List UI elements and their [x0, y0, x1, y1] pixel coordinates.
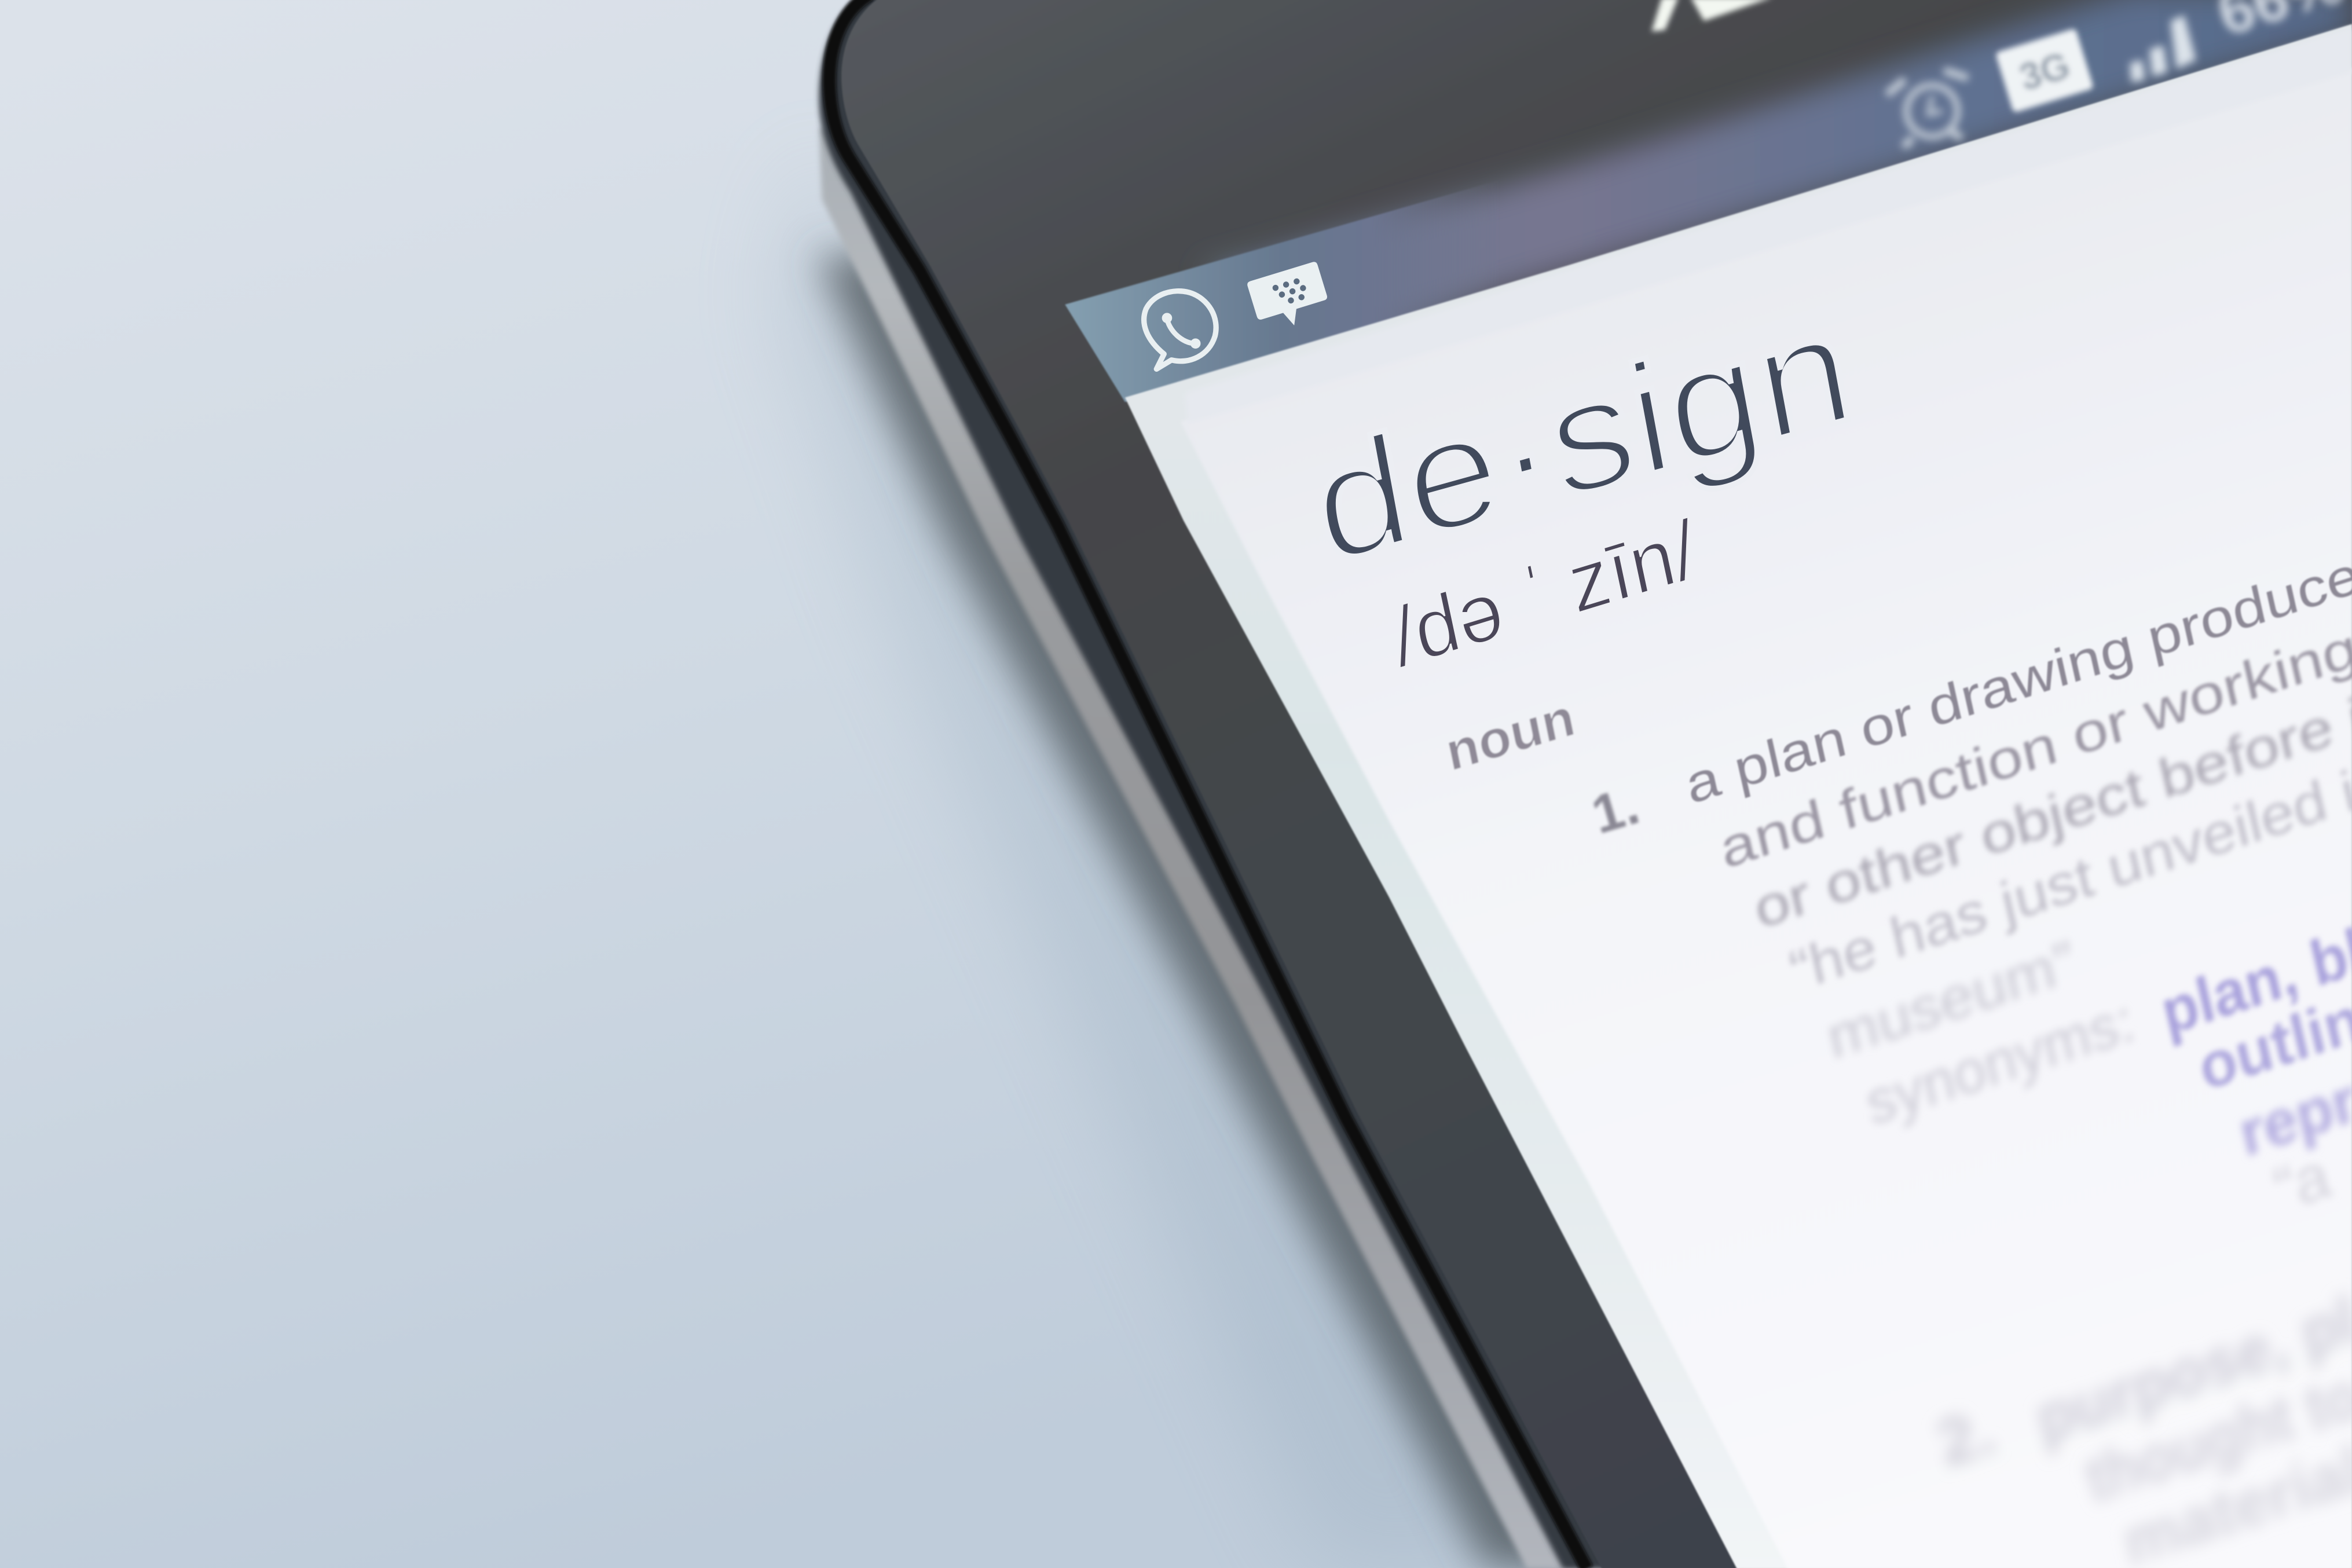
sense number two: 2.	[1929, 1394, 2004, 1481]
status bar	[1065, 0, 2352, 402]
wide soft phone shadow	[780, 150, 1530, 1567]
icon: whatsapp	[1144, 291, 1216, 369]
definition line 2: and function or working	[1714, 617, 2352, 880]
pronunciation: /də ˈ zīn/	[1384, 503, 1705, 685]
screen	[1125, 24, 2352, 1568]
top band of screen	[1185, 27, 2352, 423]
status bar band, in focus	[1065, 160, 1567, 402]
screen outer strip	[1125, 24, 2352, 1568]
part of speech: noun	[1441, 687, 1580, 782]
headword: de·sign	[1300, 278, 1864, 598]
asus logo fragment	[1651, 0, 1773, 31]
icon: alarm clock	[1887, 71, 1968, 147]
example line 1: “he has just unveiled i	[1784, 758, 2352, 1003]
example line 2: museum”	[1821, 928, 2081, 1071]
sense number one: 1.	[1585, 775, 1646, 845]
dark grey bezel	[841, 0, 2352, 1568]
example fragment: “a	[2267, 1140, 2336, 1226]
silver phone side	[819, 127, 1635, 1568]
dark phone rim	[819, 0, 2352, 1568]
definition line 3: or other object before i	[1749, 686, 2352, 940]
contact shadow beside phone	[818, 255, 1590, 1568]
icon: 3G signal badge: 3G	[2014, 43, 2075, 98]
definition card	[1181, 68, 2352, 1568]
synonyms label: synonyms:	[1860, 986, 2140, 1138]
definition text	[1300, 278, 2352, 1568]
definition line 1: a plan or drawing produce	[1680, 545, 2352, 815]
phone body	[819, 0, 2352, 1568]
icon: messenger bubble	[1247, 261, 1332, 335]
icon: cell signal bars	[2130, 15, 2196, 83]
status bar band, out of focus	[1200, 0, 2352, 338]
black rim line	[829, 0, 1587, 1568]
icon: 3G signal badge	[1995, 28, 2094, 113]
